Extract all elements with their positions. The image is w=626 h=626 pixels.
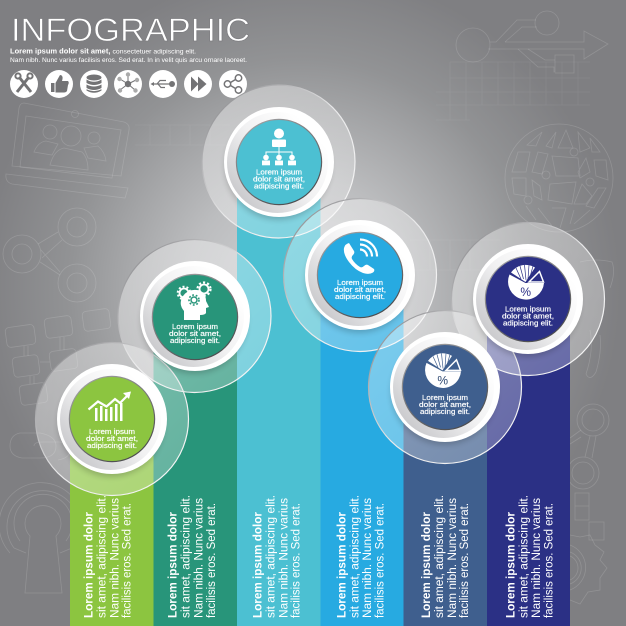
text: cyan — [253, 170, 305, 190]
column: cyan: Nam nibh. Nunc varius — [278, 498, 290, 618]
icon: usb — [149, 70, 177, 98]
text: navy: adipiscing elit. — [503, 320, 553, 328]
text: slate: Lorem ipsum — [422, 395, 468, 402]
text: cyan: adipiscing elit. — [254, 184, 304, 190]
column: cyan — [237, 162, 320, 626]
background icon: keyhole signal — [0, 483, 83, 593]
background icon: usb — [456, 11, 608, 73]
column: navy: Nam nibh. Nunc varius — [531, 498, 543, 618]
text: cyan: Lorem ipsum — [256, 170, 302, 176]
text: green — [86, 429, 138, 450]
text: slate: dolor sit amet, — [419, 402, 471, 409]
badge: teal — [140, 261, 250, 374]
column: cyan: sit amet, adipiscing elit. — [266, 495, 278, 618]
column: navy: facilisis eros. Sed erat. — [544, 503, 556, 618]
subtitle: Lorem ipsum dolor sit amet, consectetuer adipiscing elit. — [10, 46, 196, 56]
icon: org chart — [262, 128, 296, 165]
column: green: Lorem ipsum dolor — [84, 511, 96, 618]
glass discs — [36, 85, 604, 496]
column: navy — [487, 299, 570, 626]
text: slate — [419, 395, 471, 416]
column: blue: Lorem ipsum dolor — [336, 511, 348, 618]
column: green: sit amet, adipiscing elit. — [96, 495, 108, 618]
text: blue — [334, 280, 386, 301]
text: navy: Lorem ipsum — [505, 306, 551, 314]
text: teal — [169, 324, 221, 345]
text: green: adipiscing elit. — [87, 443, 137, 450]
text: navy: dolor sit amet, — [502, 314, 554, 320]
icon: thumbs up — [45, 70, 73, 98]
background icon: grid squares — [135, 62, 590, 270]
text: cyan: dolor sit amet, — [253, 176, 305, 184]
column: teal: sit amet, adipiscing elit. — [181, 495, 193, 618]
text: teal: adipiscing elit. — [170, 338, 220, 345]
icon: wrenches — [10, 70, 38, 98]
column: blue: Nam nibh. Nunc varius — [362, 498, 374, 618]
background icon: share — [3, 208, 96, 302]
badge: blue — [305, 220, 415, 333]
column: blue — [320, 275, 404, 626]
column: slate: sit amet, adipiscing elit. — [434, 495, 446, 618]
icon: percentage pie: % — [437, 373, 448, 387]
background icon: flowchart — [5, 308, 111, 406]
subtitle: Nam nibh. Nunc varius facilisis eros. Sed erat. In in velit quis arcu ornare laoreet. — [10, 57, 247, 64]
column: navy: Lorem ipsum dolor — [505, 511, 517, 618]
column: green: Nam nibh. Nunc varius — [109, 498, 121, 618]
text: green: Lorem ipsum — [89, 429, 135, 436]
text: slate: adipiscing elit. — [420, 409, 470, 416]
icon: head with gears — [178, 282, 210, 320]
column: blue: facilisis eros. Sed erat. — [374, 503, 386, 618]
icon: database — [80, 70, 108, 98]
text: teal: Lorem ipsum — [172, 324, 218, 331]
column: slate: Nam nibh. Nunc varius — [447, 498, 459, 618]
text: blue: adipiscing elit. — [335, 294, 385, 301]
text: blue: Lorem ipsum — [337, 280, 383, 287]
column: blue: sit amet, adipiscing elit. — [349, 495, 361, 618]
icon: share — [219, 70, 247, 98]
background icon: gear — [570, 493, 607, 604]
icon row — [10, 70, 247, 98]
title: INFOGRAPHIC — [11, 12, 250, 48]
badge: green — [57, 364, 167, 477]
column: teal: Nam nibh. Nunc varius — [194, 498, 206, 618]
column: slate — [404, 387, 487, 626]
text: teal: dolor sit amet, — [169, 331, 221, 338]
icon: phone — [344, 240, 377, 274]
badge: navy — [473, 244, 583, 357]
background icon: link — [10, 433, 70, 460]
badge: cyan — [224, 107, 334, 220]
column: cyan: Lorem ipsum dolor — [252, 511, 264, 618]
background icon: network nodes — [567, 404, 609, 489]
column: green — [70, 419, 154, 626]
column: slate: facilisis eros. Sed erat. — [459, 503, 471, 618]
icon: network hub — [114, 70, 142, 98]
subtitle — [10, 46, 247, 64]
column: slate: Lorem ipsum dolor — [421, 511, 433, 618]
column: teal: Lorem ipsum dolor — [168, 511, 180, 618]
background icon: right side signal arcs — [580, 260, 614, 378]
icon: fast forward — [184, 70, 212, 98]
icon: percentage pie: % — [520, 285, 531, 299]
column: teal — [154, 316, 237, 626]
column: navy: sit amet, adipiscing elit. — [518, 495, 530, 618]
column: cyan: facilisis eros. Sed erat. — [291, 503, 303, 618]
badge: slate — [390, 332, 500, 445]
icon: rising bar chart — [88, 392, 131, 421]
background icon: globe — [505, 124, 613, 232]
column: teal: facilisis eros. Sed erat. — [206, 503, 218, 618]
text: blue: dolor sit amet, — [334, 287, 386, 294]
column: green: facilisis eros. Sed erat. — [122, 503, 134, 618]
text: green: dolor sit amet, — [86, 436, 138, 443]
background icon: laptop with people — [6, 103, 129, 198]
text: navy — [502, 306, 554, 328]
